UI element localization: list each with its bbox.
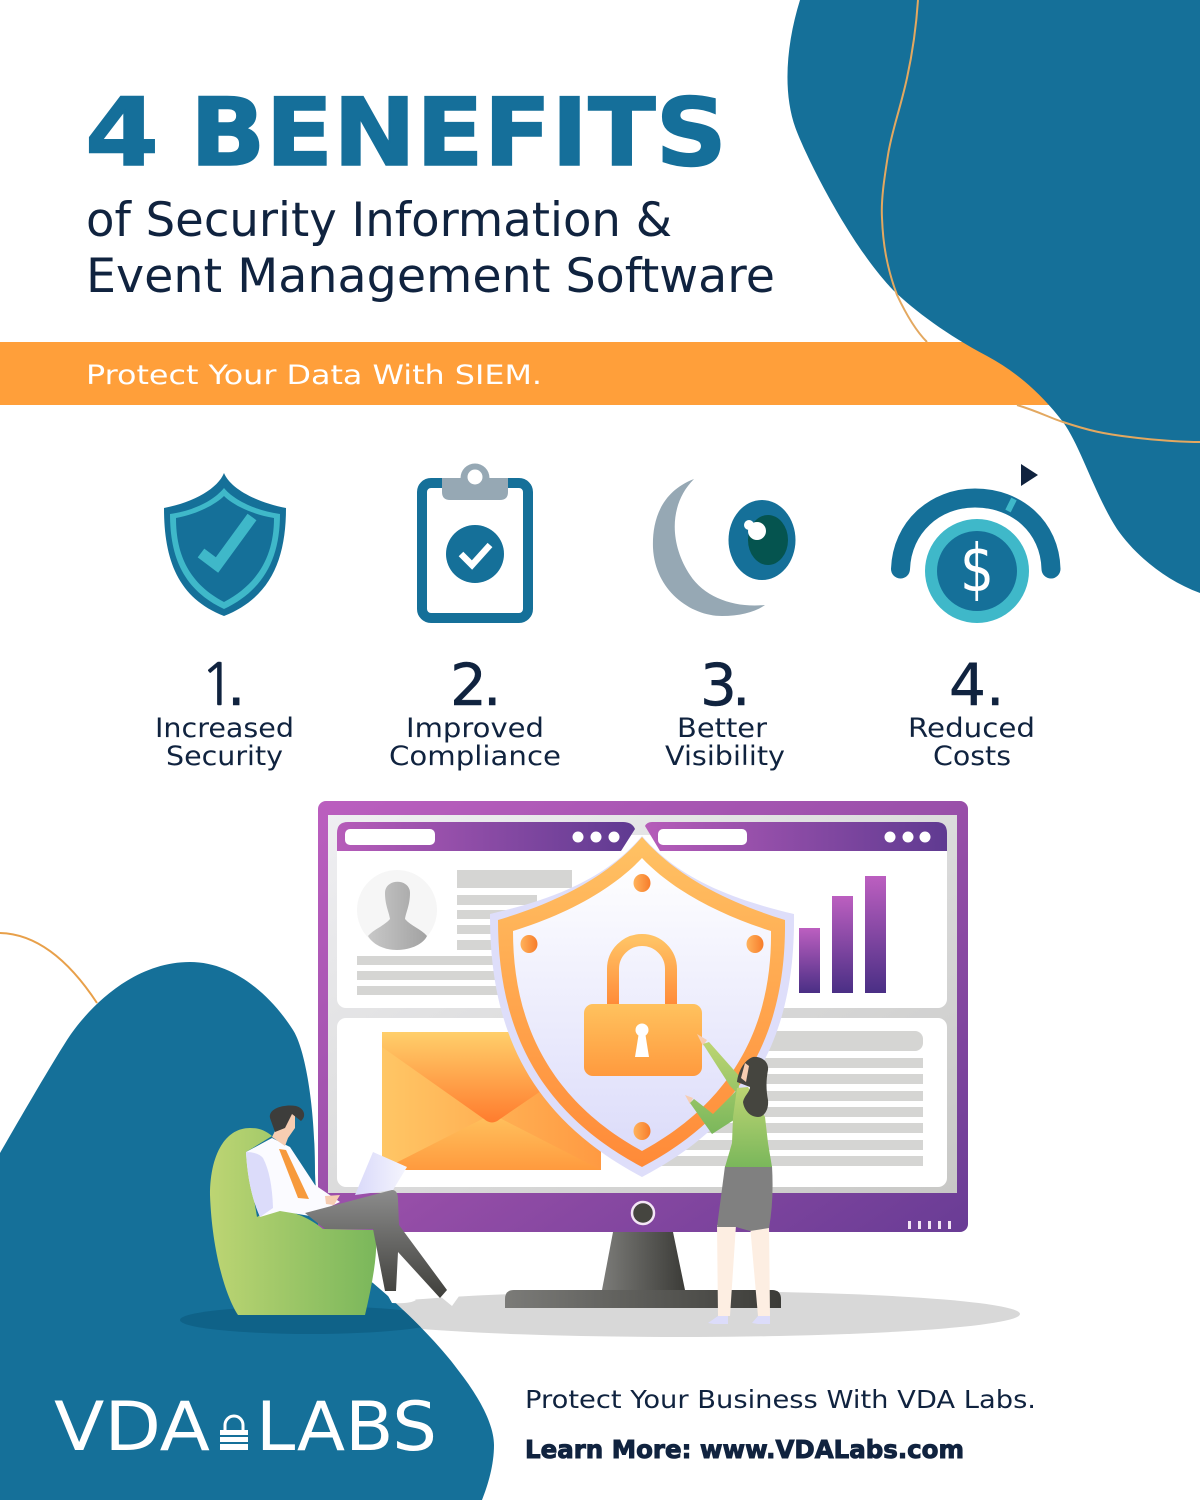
title: Event Management Software [86,249,775,304]
benefit 1: increased security [155,473,294,772]
title: of Security Information & [86,193,672,248]
monitor stand [505,1232,781,1308]
woman hands [685,1034,707,1104]
icon: shield with check [164,473,286,616]
label: Improved Compliance: Compliance [389,741,561,772]
left window header [337,822,635,851]
icon: eye [653,479,796,616]
benefit 3: better visibility [653,479,796,772]
label: Better Visibility: Better [677,713,768,744]
man on bean bag [210,1106,462,1315]
top-right orange curve [882,0,1200,442]
orange banner [0,342,1060,405]
footer tagline: Protect Your Business With VDA Labs. [525,1385,1036,1414]
benefit 4: reduced costs [900,464,1051,772]
benefit 2: improved compliance [389,464,561,772]
icon: logo padlock [220,1416,248,1450]
large shield with lock [490,836,794,1177]
woman torso [725,1087,772,1167]
monitor power button [632,1202,654,1224]
bar chart [799,876,886,993]
title: 4 [85,79,159,188]
VDA Labs logo: LABS [256,1388,437,1467]
number 4: . [986,651,1004,719]
shield rivets [520,874,764,1140]
icon: clipboard with check [422,464,528,618]
profile avatar [357,870,437,950]
label: Increased Security: Security [166,741,283,772]
man hand [325,1195,340,1205]
label: Reduced Costs: Costs [933,741,1011,772]
woman figure [685,1034,773,1324]
padlock [584,940,702,1076]
woman face [741,1063,749,1082]
man sleeve [246,1152,273,1217]
icon: gauge with dollar coin: $ [960,530,994,607]
shield orange ring [498,837,785,1167]
label: Better Visibility: Visibility [665,741,785,772]
VDA Labs logo: VDA [54,1388,210,1467]
floor shadow [340,1291,1020,1337]
woman skirt [717,1166,773,1231]
bottom-left blue blob [0,962,494,1500]
number 2: . [483,651,501,719]
man shoes [386,1292,462,1306]
man neck and face [272,1113,295,1146]
bottom panel [337,1018,947,1187]
right window header [645,822,947,851]
footer call to action: Learn More: www.VDALabs.com [525,1435,964,1464]
chair shadow on blob [180,1308,421,1334]
shield inner [513,858,771,1151]
label: Increased Security [155,713,294,772]
woman shoes [708,1316,770,1324]
envelope [382,1032,601,1170]
title: BENEFITS [190,79,727,188]
monitor vents [908,1221,951,1229]
label: Improved Compliance: Improved [406,713,544,744]
shield outer [490,836,794,1177]
label: Increased Security: Increased [155,713,294,744]
label: Improved Compliance [389,713,561,772]
laptop [355,1152,407,1195]
icon: gauge with dollar coin [900,464,1051,623]
number 1: 1 [200,656,235,714]
number 3: 3 [700,651,737,719]
monitor frame [318,801,968,1232]
right text lines [660,1031,923,1166]
man hair [270,1106,304,1132]
bottom-left orange curve [0,933,97,1003]
man shirt [246,1138,340,1217]
label: Reduced Costs: Reduced [908,713,1035,744]
bean bag chair [210,1128,376,1315]
number 4: 4 [949,651,986,719]
top-right blue blob [787,0,1200,593]
title [85,79,775,304]
man tie [279,1149,309,1199]
number 1: . [227,651,245,719]
banner text: Protect Your Data With SIEM. [86,360,542,391]
profile text lines [357,870,572,995]
man legs [305,1190,447,1298]
VDA Labs logo [54,1388,437,1467]
label: Better Visibility [665,713,785,772]
woman legs [717,1225,770,1316]
label: Reduced Costs [908,713,1035,772]
monitor illustration [318,801,968,1308]
woman arms [690,1042,740,1134]
top panel [337,835,947,1008]
number 3: . [732,651,750,719]
monitor screen [328,815,957,1193]
woman hair [737,1057,768,1117]
number 2: 2 [450,651,487,719]
